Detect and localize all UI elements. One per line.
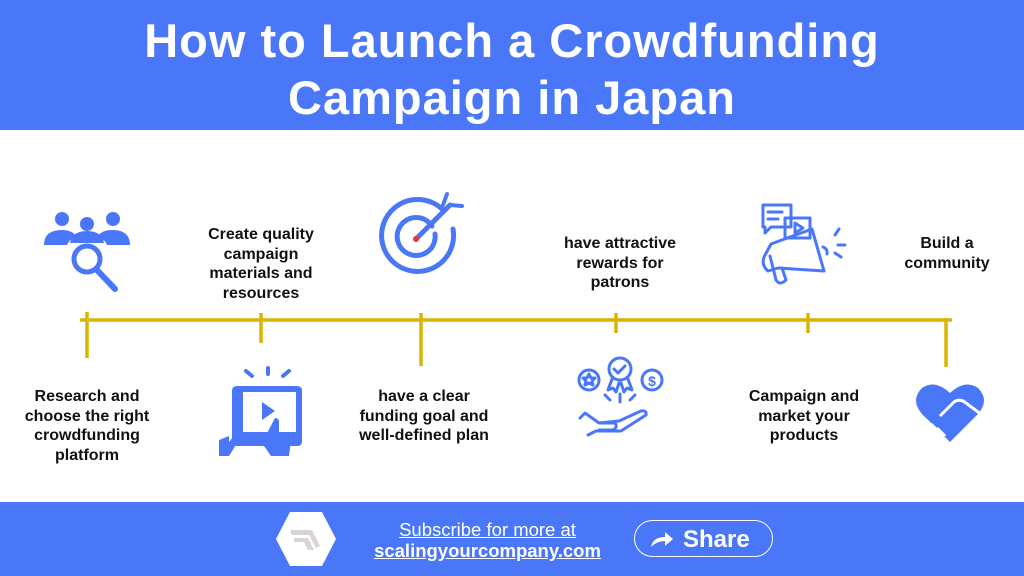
icon: heart handshake (916, 384, 984, 442)
title: How to Launch a Crowdfunding (144, 14, 880, 67)
subscribe text: Subscribe for more at (399, 519, 576, 540)
text: research: Research and (35, 388, 139, 405)
text: community: Build a (920, 235, 974, 252)
icon: megaphone (762, 204, 846, 284)
icon: people search (44, 212, 130, 292)
text: campaign: Campaign and (749, 388, 859, 405)
text: campaign: market your (758, 408, 850, 424)
text: research: platform (55, 446, 119, 464)
text: create: materials and (209, 265, 313, 282)
share button: Share (683, 526, 750, 553)
text: create: Create quality (208, 226, 314, 243)
text: community (904, 235, 990, 272)
text: research: choose the right (25, 408, 149, 424)
text: create (208, 226, 314, 302)
title (0, 0, 1024, 130)
share button (634, 520, 773, 557)
text: rewards (564, 235, 676, 291)
text: research: crowdfunding (34, 427, 140, 444)
text: campaign (749, 388, 859, 444)
logo (276, 512, 336, 566)
icon: tablet video (219, 366, 302, 456)
icon: rewards hand: $ (648, 373, 656, 389)
subscribe text (374, 519, 601, 561)
footer (0, 502, 1024, 576)
icon: target (379, 192, 464, 274)
text: create: resources (223, 284, 299, 302)
icon: rewards hand (578, 356, 664, 437)
subscribe text: scalingyourcompany.com (374, 540, 601, 561)
text: rewards: have attractive (564, 235, 676, 252)
text: goal: funding goal and (360, 408, 488, 424)
text: research (25, 388, 149, 464)
title: Campaign in Japan (288, 71, 736, 124)
text: goal (359, 388, 489, 444)
text: campaign: products (770, 427, 838, 444)
text: community: community (904, 254, 990, 272)
text: rewards: rewards for (576, 254, 664, 272)
text: create: campaign (224, 246, 298, 262)
text: goal: have a clear (378, 388, 470, 405)
text: goal: well-defined plan (359, 427, 489, 444)
text: rewards: patrons (591, 274, 649, 291)
